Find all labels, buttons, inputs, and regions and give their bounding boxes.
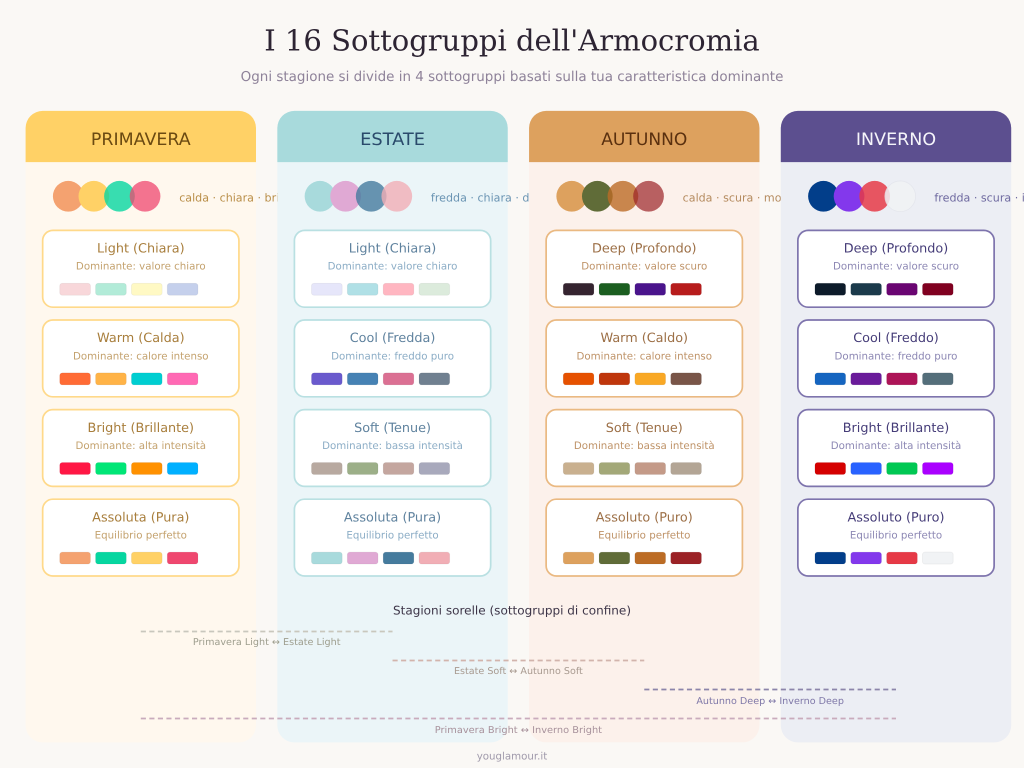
- card: primavera warm: [43, 320, 239, 397]
- card: inverno assoluto: Equilibrio perfetto: [850, 529, 942, 541]
- card: primavera assoluta: Assoluta (Pura): [92, 509, 189, 525]
- card: autunno assoluto: Equilibrio perfetto: [598, 529, 690, 541]
- card: autunno deep: Dominante: valore scuro: [581, 260, 707, 272]
- card: primavera warm: Warm (Calda): [97, 330, 185, 346]
- heading: inverno: [781, 111, 1011, 162]
- card: estate soft: Dominante: bassa intensità: [322, 439, 463, 451]
- card: inverno deep: Deep (Profondo): [844, 241, 948, 256]
- card: inverno assoluto: Assoluto (Puro): [848, 509, 944, 525]
- panel: autunno: [529, 111, 810, 742]
- traits: autunno: calda · scura · morbida: [683, 192, 810, 205]
- card: estate assoluta: [294, 499, 491, 576]
- card: inverno deep: Dominante: valore scuro: [833, 260, 959, 272]
- card: estate soft: [294, 410, 491, 486]
- footer: youglamour.it: [477, 750, 548, 762]
- card: inverno cool: Cool (Freddo): [853, 330, 939, 346]
- card: autunno deep: Deep (Profondo): [592, 241, 697, 256]
- connector: estate soft to autunno soft: Estate Soft ↔ Autunno Soft: [454, 666, 583, 677]
- panel: estate: [277, 111, 566, 742]
- card: estate light: Light (Chiara): [349, 241, 436, 256]
- heading: estate: [277, 111, 508, 162]
- heading: autunno: AUTUNNO: [601, 129, 687, 149]
- card: inverno assoluto: [798, 499, 994, 576]
- card: inverno cool: Dominante: freddo puro: [835, 350, 957, 362]
- traits: primavera: calda · chiara · brillante: [179, 192, 310, 205]
- card: autunno warm: Warm (Caldo): [600, 330, 688, 346]
- card: autunno soft: [546, 410, 742, 486]
- palette circles: primavera: [53, 181, 160, 212]
- card: primavera light: Dominante: valore chiaro: [76, 260, 206, 272]
- subtitle: Ogni stagione si divide in 4 sottogruppi basati sulla tua caratteristica dominante: [241, 68, 783, 84]
- palette circles: estate: [305, 181, 412, 212]
- card: primavera assoluta: Equilibrio perfetto: [95, 529, 187, 541]
- card: autunno warm: [546, 320, 742, 397]
- card: inverno bright: Bright (Brillante): [843, 420, 949, 435]
- panel: primavera: [26, 111, 310, 742]
- heading: estate: ESTATE: [360, 129, 425, 149]
- card: estate light: Dominante: valore chiaro: [328, 260, 457, 272]
- card: estate assoluta: Assoluta (Pura): [344, 509, 441, 525]
- card: estate cool: [294, 320, 491, 397]
- connector: primavera light to estate light: Primavera Light ↔ Estate Light: [193, 637, 341, 648]
- card: autunno soft: Soft (Tenue): [606, 420, 683, 435]
- card: autunno soft: Dominante: bassa intensità: [574, 439, 715, 451]
- card: primavera assoluta: [43, 499, 239, 576]
- traits: estate: fredda · chiara · delicata: [431, 192, 566, 205]
- card: inverno bright: [798, 410, 994, 486]
- heading: primavera: [26, 111, 256, 162]
- title: I 16 Sottogruppi dell'Armocromia: [264, 24, 760, 58]
- card: primavera bright: Dominante: alta intensità: [76, 439, 206, 451]
- card: estate cool: Dominante: freddo puro: [331, 350, 454, 362]
- connector: autunno deep to inverno deep: Autunno Deep ↔ Inverno Deep: [696, 695, 844, 707]
- card: primavera bright: [43, 410, 239, 486]
- card: primavera light: [43, 230, 239, 307]
- card: estate soft: Soft (Tenue): [354, 420, 431, 435]
- card: inverno bright: Dominante: alta intensità: [831, 439, 961, 451]
- heading: inverno: INVERNO: [856, 129, 936, 149]
- panel: inverno: [781, 111, 1024, 742]
- card: estate light: [294, 230, 491, 307]
- palette circles: autunno: [556, 181, 664, 212]
- card: primavera warm: Dominante: calore intenso: [73, 350, 209, 362]
- card: estate assoluta: Equilibrio perfetto: [346, 529, 439, 541]
- card: primavera light: Light (Chiara): [97, 241, 185, 256]
- card: inverno cool: [798, 320, 994, 397]
- card: inverno deep: [798, 230, 994, 307]
- card: autunno warm: Dominante: calore intenso: [576, 350, 712, 362]
- heading: stagioni sorelle: Stagioni sorelle (sottogruppi di confine): [393, 604, 631, 618]
- card: autunno deep: [546, 230, 742, 307]
- card: autunno assoluto: [546, 499, 742, 576]
- heading: autunno: [529, 111, 759, 162]
- palette circles: inverno: [808, 181, 916, 212]
- card: primavera bright: Bright (Brillante): [88, 420, 194, 435]
- heading: primavera: PRIMAVERA: [91, 129, 191, 149]
- card: estate cool: Cool (Fredda): [350, 330, 435, 346]
- connector: primavera bright to inverno bright: Primavera Bright ↔ Inverno Bright: [435, 724, 603, 736]
- card: autunno assoluto: Assoluto (Puro): [596, 509, 693, 525]
